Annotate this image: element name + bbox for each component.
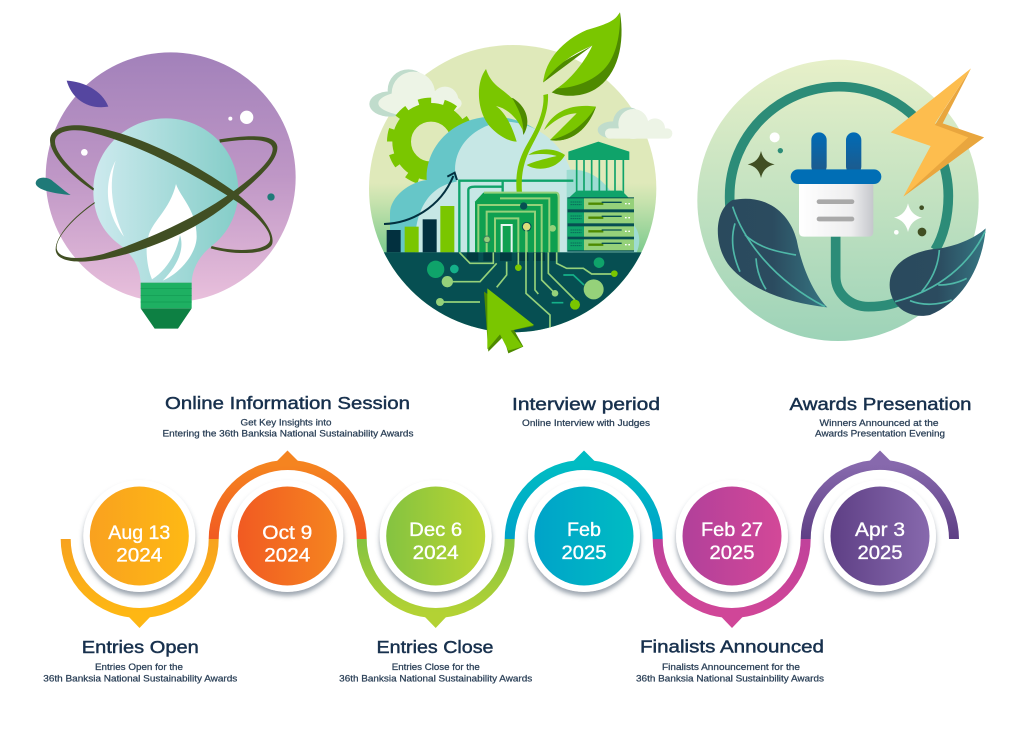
label: Entries Open: Entries Open for the bbox=[95, 662, 183, 672]
arc: Aug 13 bbox=[66, 539, 214, 628]
orbit ring two bbox=[56, 136, 277, 262]
dark circuit ground bbox=[384, 230, 642, 332]
date circle: Apr 3 2025 bbox=[824, 480, 936, 592]
label: Awards Presenation: Winners Announced at the bbox=[820, 418, 938, 428]
plug bbox=[791, 132, 881, 237]
right cloud bbox=[598, 107, 672, 139]
label: Entries Close bbox=[339, 637, 533, 684]
arc: Feb bbox=[510, 450, 658, 539]
label: Awards Presenation bbox=[790, 394, 972, 439]
label: Online Information Session: Get Key Insights into bbox=[240, 418, 332, 428]
date circle: Oct 9 2024 bbox=[231, 480, 343, 592]
bar chart with arrow bbox=[384, 173, 457, 252]
date circle: Feb 2025 bbox=[528, 480, 640, 592]
cord ring bbox=[730, 87, 948, 250]
date circle: Feb 2025: 2025 bbox=[562, 543, 606, 564]
date circle: Aug 13 2024: 2024 bbox=[116, 546, 163, 567]
label: Interview period bbox=[512, 394, 660, 428]
label: Entries Close: Entries Close for the bbox=[392, 662, 480, 672]
dark sparkle bbox=[748, 151, 775, 178]
label: Online Information Session bbox=[162, 393, 414, 439]
date circle: Dec 6 2024 bbox=[380, 480, 492, 592]
date circle: Feb 27 2025: Feb 27 bbox=[701, 520, 763, 541]
timeline track bbox=[66, 450, 954, 628]
white sparkle bbox=[894, 203, 922, 232]
icon: purple leaf bbox=[67, 81, 108, 107]
label: Online Information Session: Entering the 36th Banksia National Sustainability Awards bbox=[162, 429, 414, 439]
date circle: Aug 13 2024 bbox=[83, 480, 195, 592]
arc: Feb 27 bbox=[658, 539, 806, 628]
date circle: Oct 9 2024: 2024 bbox=[264, 546, 311, 567]
lightning bolt bbox=[891, 68, 984, 197]
bulb base bbox=[141, 283, 192, 329]
large cloud inner bbox=[415, 122, 573, 252]
server rack bbox=[567, 191, 634, 252]
cord tail bbox=[836, 237, 898, 307]
label: Entries Open: Entries Open bbox=[82, 637, 199, 657]
date circle: Dec 6 2024: 2024 bbox=[413, 543, 459, 564]
label: Finalists Announced bbox=[636, 637, 825, 684]
dots bbox=[770, 132, 926, 236]
left leaf bbox=[479, 69, 527, 142]
large cloud bbox=[390, 117, 573, 252]
illustration: plug and leaves bbox=[697, 60, 986, 341]
date circle: Feb 2025: Feb bbox=[567, 520, 601, 541]
bulb highlight bbox=[108, 161, 124, 237]
stem bbox=[516, 94, 548, 193]
label: Interview period: Interview period bbox=[512, 394, 660, 414]
small leaf bbox=[527, 149, 565, 169]
circuit frame bbox=[459, 181, 573, 252]
date circle: Oct 9 2024: Oct 9 bbox=[262, 523, 312, 544]
label: Entries Open: 36th Banksia National Sustainability Awards bbox=[43, 674, 238, 684]
arc: Dec 6 bbox=[362, 539, 510, 628]
left leaf bbox=[718, 199, 827, 307]
label: Entries Open bbox=[43, 637, 238, 684]
orbit ring one bbox=[50, 125, 273, 253]
date circle: Feb 27 2025: 2025 bbox=[710, 543, 754, 564]
label: Awards Presenation: Awards Presentation Evening bbox=[815, 429, 945, 439]
label: Finalists Announced: Finalists Announced bbox=[640, 637, 824, 657]
big leaf bbox=[543, 12, 622, 96]
label: Entries Close: 36th Banksia National Sustainability Awards bbox=[339, 674, 533, 684]
icon: teal leaf bbox=[36, 178, 71, 195]
label: Online Information Session: Online Information Session bbox=[165, 393, 410, 413]
left cloud bbox=[369, 69, 462, 117]
date circle: Dec 6 2024: Dec 6 bbox=[409, 520, 462, 541]
date circle: Aug 13 2024: Aug 13 bbox=[108, 523, 170, 544]
right cloud behind server bbox=[567, 170, 639, 252]
sparkle dots bbox=[81, 111, 275, 201]
pale green circle bbox=[697, 60, 979, 341]
label: Awards Presenation: Awards Presenation bbox=[790, 394, 972, 414]
arc: Apr 3 bbox=[806, 450, 954, 539]
label: Entries Close: Entries Close bbox=[376, 637, 494, 657]
temple bbox=[568, 142, 629, 193]
date circle: Apr 3 2025: 2025 bbox=[858, 543, 902, 564]
cursor arrow bbox=[484, 288, 534, 353]
circuit chip bbox=[475, 193, 559, 267]
label: Finalists Announced: Finalists Announcement for the bbox=[662, 662, 800, 672]
arc: Oct 9 bbox=[214, 450, 362, 539]
right leaf bbox=[890, 228, 986, 316]
date circle: Apr 3 2025: Apr 3 bbox=[855, 520, 905, 541]
white flame leaf bbox=[147, 184, 197, 281]
purple background circle bbox=[46, 52, 296, 302]
bulb glass bbox=[93, 118, 238, 283]
middle leaf bbox=[544, 106, 596, 141]
label: Interview period: Online Interview with Judges bbox=[522, 418, 651, 428]
illustration: light bulb with orbits bbox=[36, 52, 296, 329]
green background circle bbox=[369, 45, 656, 332]
gear bbox=[392, 102, 470, 181]
illustration: eco technology bbox=[360, 12, 672, 353]
label: Finalists Announced: 36th Banksia National Sustainbility Awards bbox=[636, 674, 825, 684]
date circle: Feb 27 2025 bbox=[676, 480, 788, 592]
